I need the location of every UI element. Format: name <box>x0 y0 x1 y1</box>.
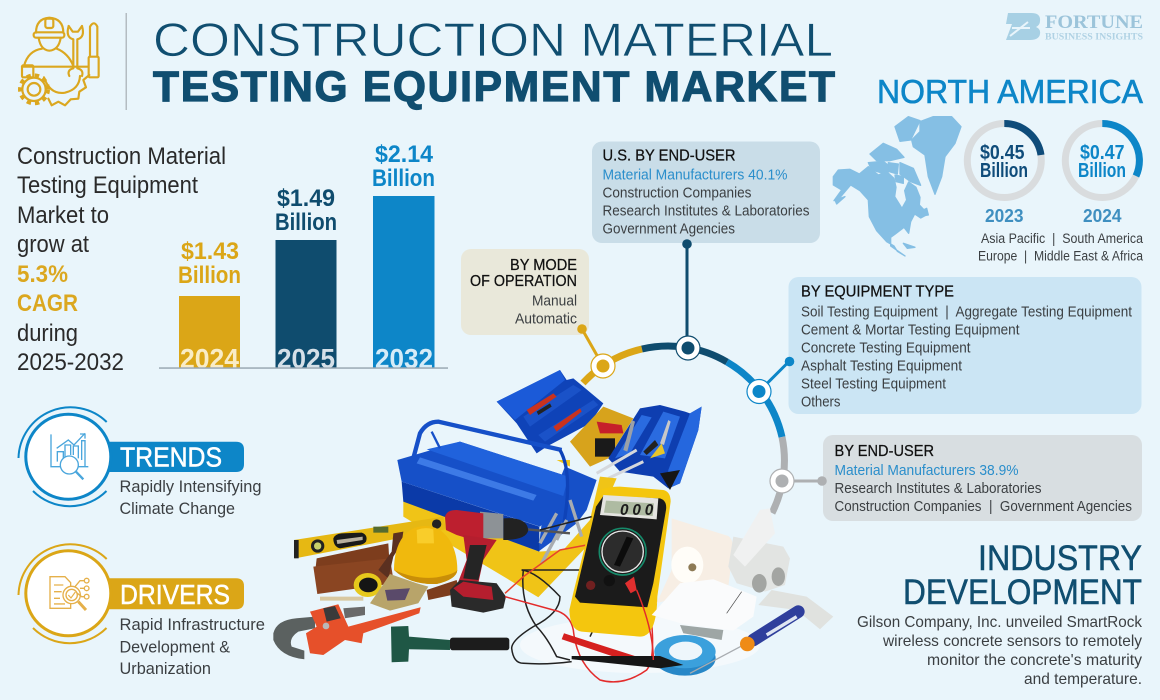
heading: North America: NORTH AMERICA <box>877 74 1144 111</box>
wires <box>505 517 653 682</box>
junction box and cable glands <box>728 508 833 629</box>
chart: donut 2023: 2023 <box>985 206 1024 226</box>
panel: by equipment type: Concrete Testing Equipment <box>801 340 970 356</box>
logo: Fortune Business Insights <box>1006 13 1143 42</box>
text: drivers detail: Rapid Infrastructure <box>120 615 265 634</box>
text: market growth statement <box>17 143 226 376</box>
bar: 2024: $1.43 <box>181 238 239 265</box>
logo: Fortune Business Insights: FORTUNE <box>1045 13 1143 33</box>
text: drivers detail <box>120 615 265 678</box>
text: market growth statement: grow at <box>17 231 89 258</box>
text: market growth statement: Testing Equipment <box>17 172 198 199</box>
rubber mallet <box>391 626 509 662</box>
chart: donut 2024: Billion <box>1078 160 1126 182</box>
text: other regions <box>978 231 1143 264</box>
heading: industry development: DEVELOPMENT <box>903 573 1142 612</box>
text: trends detail: Climate Change <box>120 499 235 518</box>
bar: 2032: $2.14 <box>375 141 434 168</box>
large yellow and blue toolbox <box>397 422 617 597</box>
bar: 2032: Billion <box>372 165 435 192</box>
test probes <box>562 590 683 668</box>
panel: trends <box>18 407 262 518</box>
text: industry development detail: monitor the concrete's maturity <box>927 652 1142 669</box>
heading: industry development <box>903 539 1142 612</box>
text: other regions: Europe | Middle East & Africa <box>978 248 1143 264</box>
panel: by equipment type: Others <box>801 394 840 410</box>
chart: donut 2024 <box>1065 123 1139 226</box>
pipe wrench <box>273 604 421 659</box>
panel: by end-user: BY END-USER <box>834 443 934 460</box>
node: equipment type <box>747 357 794 404</box>
panel: by equipment type: Soil Testing Equipment | Aggregate Testing Equipment <box>801 304 1132 320</box>
digital multimeter <box>569 487 671 637</box>
ground glow <box>520 617 760 673</box>
panel: by mode of operation: Manual <box>532 294 577 310</box>
pill: trends: TRENDS <box>120 442 222 472</box>
title <box>153 14 835 111</box>
title: CONSTRUCTION MATERIAL <box>153 14 833 67</box>
text: drivers detail: Urbanization <box>120 659 211 678</box>
panel: by mode of operation: BY MODE <box>510 257 577 274</box>
text: trends detail <box>120 477 262 518</box>
diagram: segmented arc with connector nodes <box>577 239 827 513</box>
chart: donut 2023: Billion <box>980 160 1028 182</box>
tape measure and gloves <box>320 573 428 611</box>
heading: industry development: INDUSTRY <box>978 539 1142 578</box>
icon: document with magnifier <box>50 577 89 610</box>
panel: U.S. by end-user: U.S. BY END-USER <box>602 148 736 164</box>
blue insulation tape <box>654 635 716 676</box>
text: other regions: Asia Pacific | South America <box>981 231 1143 246</box>
text: drivers detail: Development & <box>120 638 231 656</box>
bar: 2024: Billion <box>178 262 241 289</box>
panel: by equipment type <box>788 277 1142 414</box>
chart: donut 2024: 2024 <box>1083 206 1122 226</box>
text: industry development detail <box>857 614 1143 688</box>
node: mode of operation <box>577 324 615 378</box>
node: U.S. by end-user <box>676 239 700 360</box>
chart: donut 2024: $0.47 <box>1080 142 1124 164</box>
text: industry development detail: wireless concrete sensors to remotely <box>882 633 1142 650</box>
icon: chart with magnifier <box>51 433 88 479</box>
panel: U.S. by end-user: Material Manufacturers 40.1% <box>602 168 788 184</box>
chart: donut 2023 <box>967 123 1041 226</box>
panel: by end-user: Material Manufacturers 38.9% <box>834 463 1019 479</box>
white switch <box>652 579 757 640</box>
panel: by mode of operation: OF OPERATION <box>470 273 577 290</box>
bar chart: market size <box>159 141 448 374</box>
divider <box>126 13 127 110</box>
bar: 2032 <box>372 141 435 374</box>
panel: by end-user: Research Institutes & Laboratories <box>834 481 1042 497</box>
panel: by mode of operation <box>461 249 589 335</box>
open cantilever toolbox with trays <box>497 370 702 490</box>
pill: drivers: DRIVERS <box>120 579 230 610</box>
bar: 2032: 2032 <box>375 343 433 374</box>
text: market growth statement: CAGR <box>17 290 78 317</box>
text: industry development detail: Gilson Company, Inc. unveiled SmartRock <box>857 614 1143 631</box>
bar: 2025: 2025 <box>277 343 335 374</box>
map: North America <box>833 117 961 256</box>
text: trends detail: Rapidly Intensifying <box>120 477 262 496</box>
cordless drill <box>445 510 570 613</box>
panel: by mode of operation: Automatic <box>515 312 577 328</box>
digital multimeter: 000 <box>620 502 654 519</box>
chart: donut 2023: $0.45 <box>980 142 1024 164</box>
icon: trend ring <box>18 407 111 506</box>
panel: by equipment type: Cement & Mortar Testing Equipment <box>801 322 1020 338</box>
illustration: construction testing tools <box>273 370 833 682</box>
panel: by equipment type: Steel Testing Equipment <box>801 376 946 392</box>
text: market growth statement: during <box>17 320 78 347</box>
text: market growth statement: Market to <box>17 202 109 229</box>
icon: construction worker with tools <box>20 18 99 105</box>
icon: drivers ring <box>18 544 111 643</box>
panel: by equipment type: Asphalt Testing Equipment <box>801 358 962 374</box>
yellow hard hat <box>394 526 457 584</box>
screwdriver <box>690 612 798 673</box>
panel: U.S. by end-user: Research Institutes & Laboratories <box>602 204 810 220</box>
bar: 2024: 2024 <box>180 343 239 374</box>
panel: by end-user <box>823 435 1142 521</box>
bar: 2025: $1.49 <box>277 185 335 212</box>
panel: by end-user: Construction Companies | Government Agencies <box>834 499 1132 515</box>
bar: 2025 <box>275 185 337 374</box>
electrical socket <box>657 518 733 603</box>
logo: Fortune Business Insights: BUSINESS INSIGHTS <box>1045 32 1143 42</box>
panel: U.S. by end-user <box>592 142 820 243</box>
text: market growth statement: 5.3% <box>17 261 68 288</box>
title: TESTING EQUIPMENT MARKET <box>153 64 835 111</box>
panel: U.S. by end-user: Construction Companies <box>602 186 752 202</box>
text: industry development detail: and temperature. <box>1024 671 1142 688</box>
panel: drivers <box>18 544 265 678</box>
node: end-user <box>770 469 827 493</box>
spirit level <box>294 517 446 558</box>
panel: by equipment type: BY EQUIPMENT TYPE <box>801 284 954 300</box>
panel: U.S. by end-user: Government Agencies <box>602 222 735 238</box>
bar: 2024 <box>178 238 241 374</box>
text: market growth statement: Construction Material <box>17 143 226 170</box>
text: market growth statement: 2025-2032 <box>17 349 124 376</box>
bar: 2025: Billion <box>275 209 337 236</box>
brick stack and trowel <box>313 532 460 600</box>
